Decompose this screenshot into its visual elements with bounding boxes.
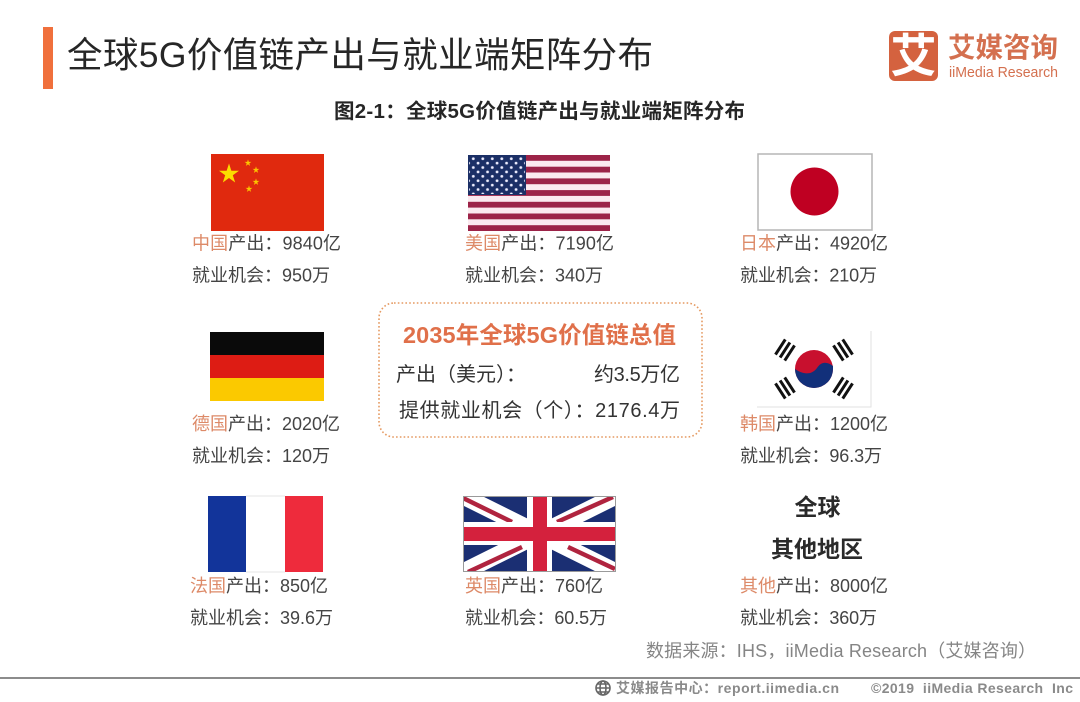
rest of world heading: 全球	[794, 494, 840, 520]
icon: China flag	[211, 154, 324, 231]
callout output label: 产出（美元）：	[396, 358, 526, 387]
title accent bar	[43, 27, 53, 89]
US jobs: 就业机会：340万	[465, 262, 603, 288]
panel: 2035 global total callout	[379, 303, 702, 437]
icon: UK flag	[463, 496, 616, 572]
South Korea jobs: 就业机会：96.3万	[740, 442, 882, 468]
UK jobs: 就业机会：60.5万	[465, 604, 607, 630]
Germany jobs: 就业机会：120万	[192, 442, 330, 468]
logo: iiMedia Research: 艾	[890, 30, 936, 82]
panel: United Kingdom	[463, 496, 616, 630]
logo: iiMedia Research: 艾媒咨询	[948, 32, 1058, 63]
panel: South Korea	[740, 331, 888, 468]
callout heading: 2035年全球5G价值链总值	[403, 322, 676, 348]
icon: Germany flag	[210, 332, 324, 401]
rest of world output: 其他产出：8000亿	[740, 572, 888, 598]
callout jobs row: 提供就业机会（个）：2176.4万	[399, 394, 680, 423]
France jobs: 就业机会：39.6万	[190, 604, 333, 630]
title: 全球5G价值链产出与就业端矩阵分布	[67, 35, 653, 75]
US output: 美国产出：7190亿	[465, 230, 614, 256]
data source note: 数据来源：IHS，iiMedia Research（艾媒咨询）	[646, 637, 1036, 663]
Japan output: 日本产出：4920亿	[740, 230, 888, 256]
panel: Japan	[740, 154, 888, 288]
France output: 法国产出：850亿	[190, 572, 328, 598]
footer report link: 艾媒报告中心：report.iimedia.cn	[616, 678, 839, 698]
icon: Japan flag	[758, 154, 872, 230]
icon: South Korea flag	[757, 331, 871, 407]
panel: United States	[465, 155, 614, 288]
Japan jobs: 就业机会：210万	[740, 262, 877, 288]
panel: France	[190, 496, 333, 630]
icon: globe	[596, 681, 610, 695]
rest of world heading: 其他地区	[771, 536, 863, 562]
Germany output: 德国产出：2020亿	[192, 410, 340, 436]
panel: rest of world	[740, 494, 888, 630]
UK output: 英国产出：760亿	[465, 572, 603, 598]
icon: France flag	[208, 496, 323, 572]
logo: iiMedia Research	[889, 30, 1058, 82]
icon: US flag	[468, 155, 610, 231]
logo: iiMedia Research: iiMedia Research	[949, 65, 1058, 81]
footer copyright: ©2019 iiMedia Research Inc	[871, 680, 1073, 696]
South Korea output: 韩国产出：1200亿	[740, 410, 888, 436]
panel: China	[192, 154, 341, 288]
footer	[596, 678, 1073, 698]
callout output value: 约3.5万亿	[594, 363, 680, 386]
China jobs: 就业机会：950万	[192, 262, 330, 288]
subtitle: 图2-1：全球5G价值链产出与就业端矩阵分布	[334, 94, 745, 124]
China output: 中国产出：9840亿	[192, 230, 341, 256]
rest of world jobs: 就业机会：360万	[740, 604, 877, 630]
panel: Germany	[192, 332, 340, 468]
rest of world heading	[771, 494, 863, 562]
